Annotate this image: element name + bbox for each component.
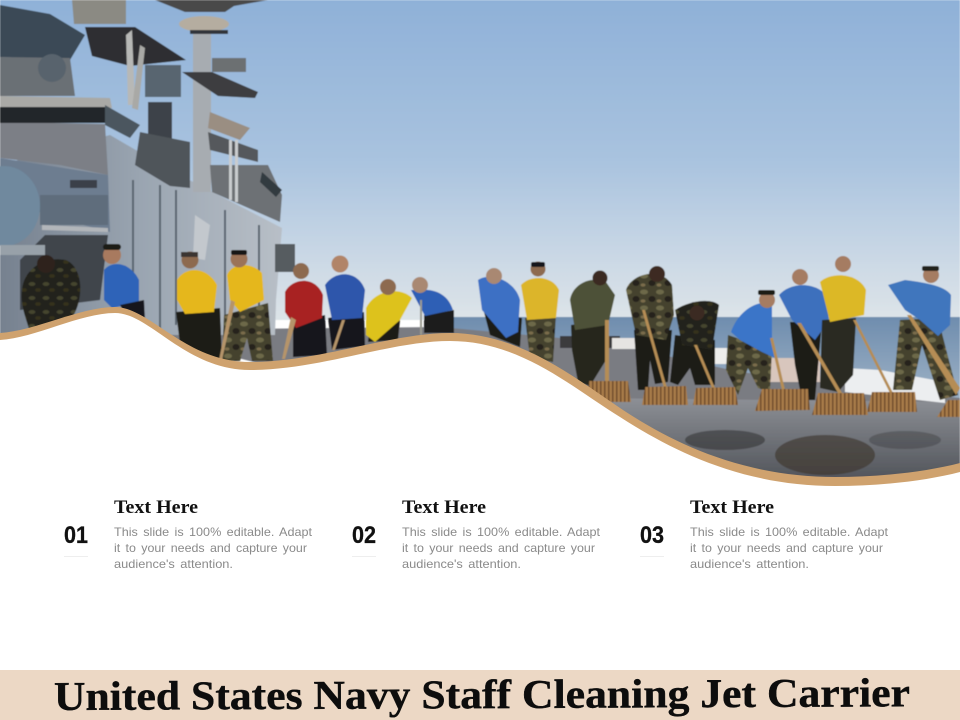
item 02	[352, 497, 601, 571]
title: United States Navy Staff Cleaning Jet Carrier	[54, 669, 910, 719]
sailor 8 blue	[411, 277, 454, 335]
sailor 6 blue	[325, 256, 365, 350]
body 03: This slide is 100% editable. Adapt	[690, 525, 889, 539]
body 01: audience's attention.	[114, 557, 233, 571]
sailors: left group	[22, 244, 454, 361]
sailor 2 blue	[103, 244, 145, 320]
sailor 9 blue	[478, 268, 522, 347]
sailor 4 yellow	[219, 250, 273, 361]
item 01	[64, 497, 313, 571]
body 01	[114, 525, 313, 571]
ship: hull and island	[0, 0, 295, 335]
body 01: This slide is 100% editable. Adapt	[114, 525, 313, 539]
sailor 10 yellow	[521, 262, 559, 362]
sailor 11 olive	[570, 270, 615, 386]
body 02: This slide is 100% editable. Adapt	[402, 525, 601, 539]
sailor 14 blue	[726, 290, 775, 395]
body 03: audience's attention.	[690, 557, 809, 571]
sailor 1 camo	[22, 255, 80, 332]
radome	[0, 166, 40, 246]
number 03: 03	[640, 522, 664, 549]
sailor 15 blue	[779, 269, 830, 400]
photo: sailors sweeping the carrier deck	[0, 0, 960, 490]
wave: white area	[0, 313, 960, 720]
sailor 13 dark camo	[670, 301, 719, 385]
sailors: right group	[478, 256, 958, 400]
heading 02: Text Here	[402, 497, 486, 518]
sailor 12 camo	[626, 266, 674, 390]
title band	[0, 670, 960, 720]
sailor 17 blue	[888, 266, 958, 400]
wave: tan border	[0, 307, 960, 720]
sailor 16 yellow	[820, 256, 866, 392]
body 02	[402, 525, 601, 571]
item 03	[640, 497, 889, 571]
body 03	[690, 525, 889, 571]
sea	[440, 317, 960, 407]
body 03: it to your needs and capture your	[690, 541, 883, 555]
sky	[0, 0, 960, 320]
brooms	[587, 310, 960, 417]
number 02: 02	[352, 522, 376, 549]
body 02: audience's attention.	[402, 557, 521, 571]
sailor 7 yellow	[366, 279, 412, 342]
sailor 3 yellow	[176, 252, 222, 360]
flight deck	[130, 327, 960, 490]
heading 03: Text Here	[690, 497, 774, 518]
heading 01: Text Here	[114, 497, 198, 518]
body 01: it to your needs and capture your	[114, 541, 307, 555]
body 02: it to your needs and capture your	[402, 541, 595, 555]
number 01: 01	[64, 522, 88, 549]
sailor 5 red	[282, 263, 327, 359]
